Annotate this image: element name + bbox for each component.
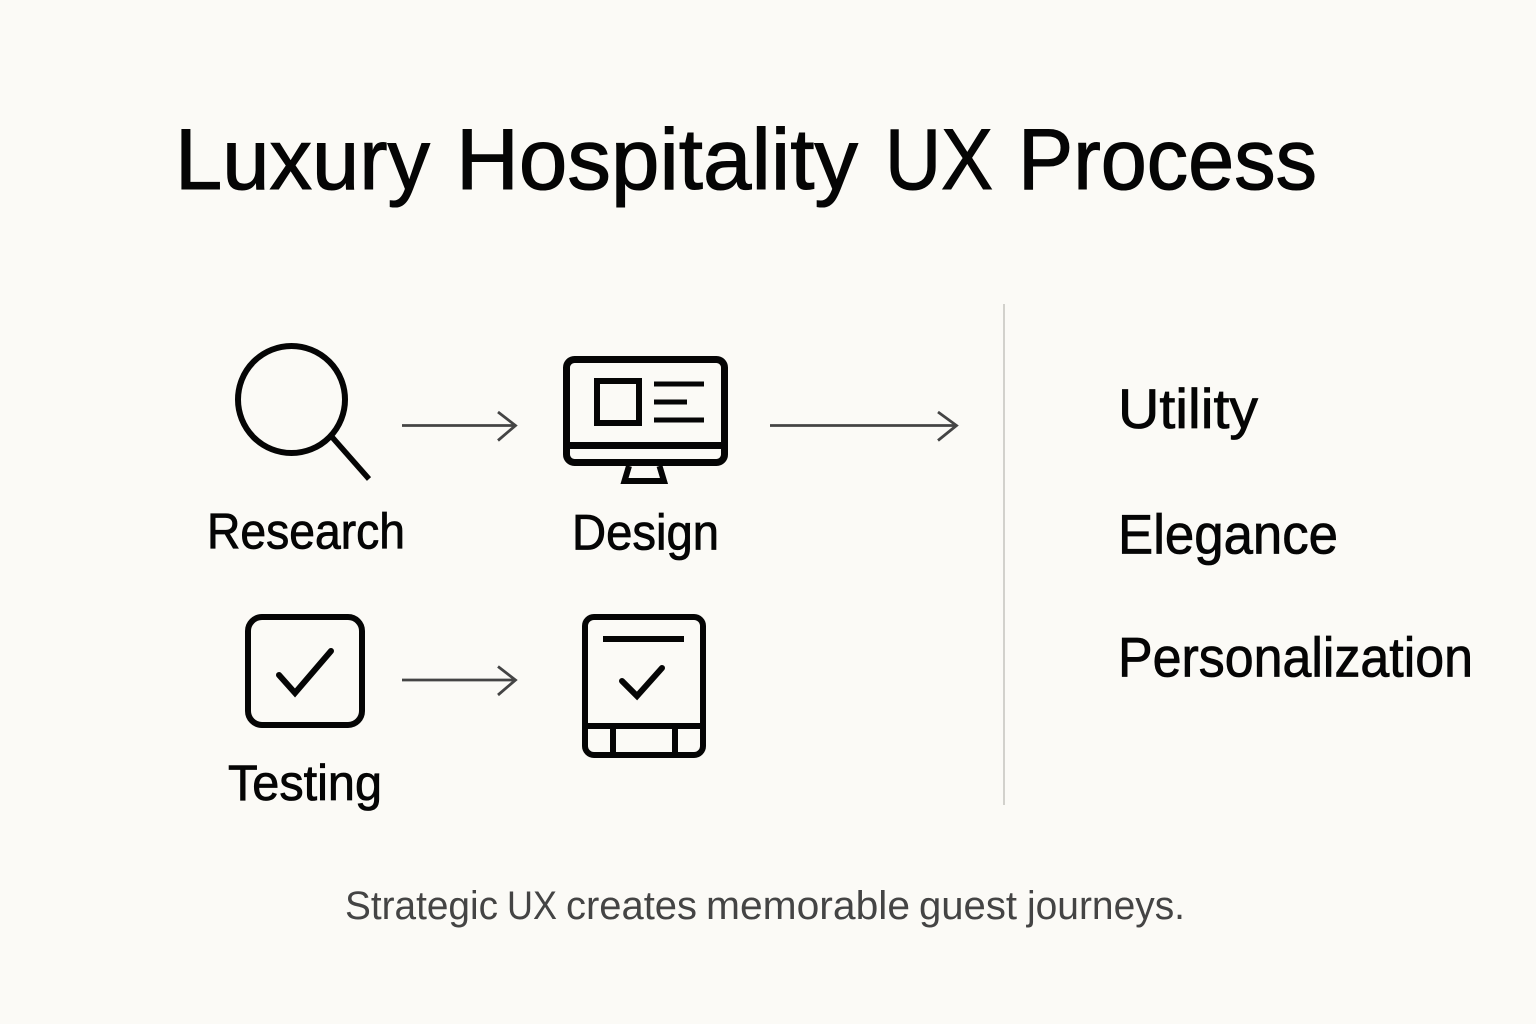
tagline: Strategic bbox=[345, 884, 498, 928]
icon: checkbox (Testing) bbox=[248, 617, 362, 725]
tagline bbox=[345, 884, 1185, 928]
pillar: Utility: Utility bbox=[1118, 377, 1258, 440]
label: Design: Design bbox=[572, 504, 719, 560]
tagline: memorable bbox=[706, 884, 910, 928]
pillar: Elegance: Elegance bbox=[1118, 502, 1338, 566]
panel: UX pillars bbox=[1118, 377, 1473, 688]
arrow: research to design bbox=[402, 412, 516, 440]
arrow: design to pillars bbox=[770, 412, 956, 440]
panel: process flow bbox=[207, 346, 956, 811]
tagline: guest bbox=[919, 884, 1017, 928]
title: Luxury bbox=[175, 112, 430, 208]
arrow: testing to tablet bbox=[402, 666, 516, 695]
label: Research: Research bbox=[207, 504, 405, 560]
label: Testing: Testing bbox=[228, 755, 382, 811]
tagline: creates bbox=[566, 884, 697, 928]
icon: tablet with check bbox=[585, 617, 703, 755]
title bbox=[175, 112, 1317, 208]
icon: desktop monitor (Design) bbox=[566, 360, 725, 481]
title: UX bbox=[885, 112, 993, 208]
tagline: UX bbox=[507, 884, 557, 928]
pillar: Personalization: Personalization bbox=[1118, 626, 1473, 688]
title: Process bbox=[1018, 112, 1317, 208]
title: Hospitality bbox=[456, 112, 858, 208]
icon: magnifying glass (Research) bbox=[238, 346, 369, 479]
tagline: journeys. bbox=[1026, 884, 1185, 928]
